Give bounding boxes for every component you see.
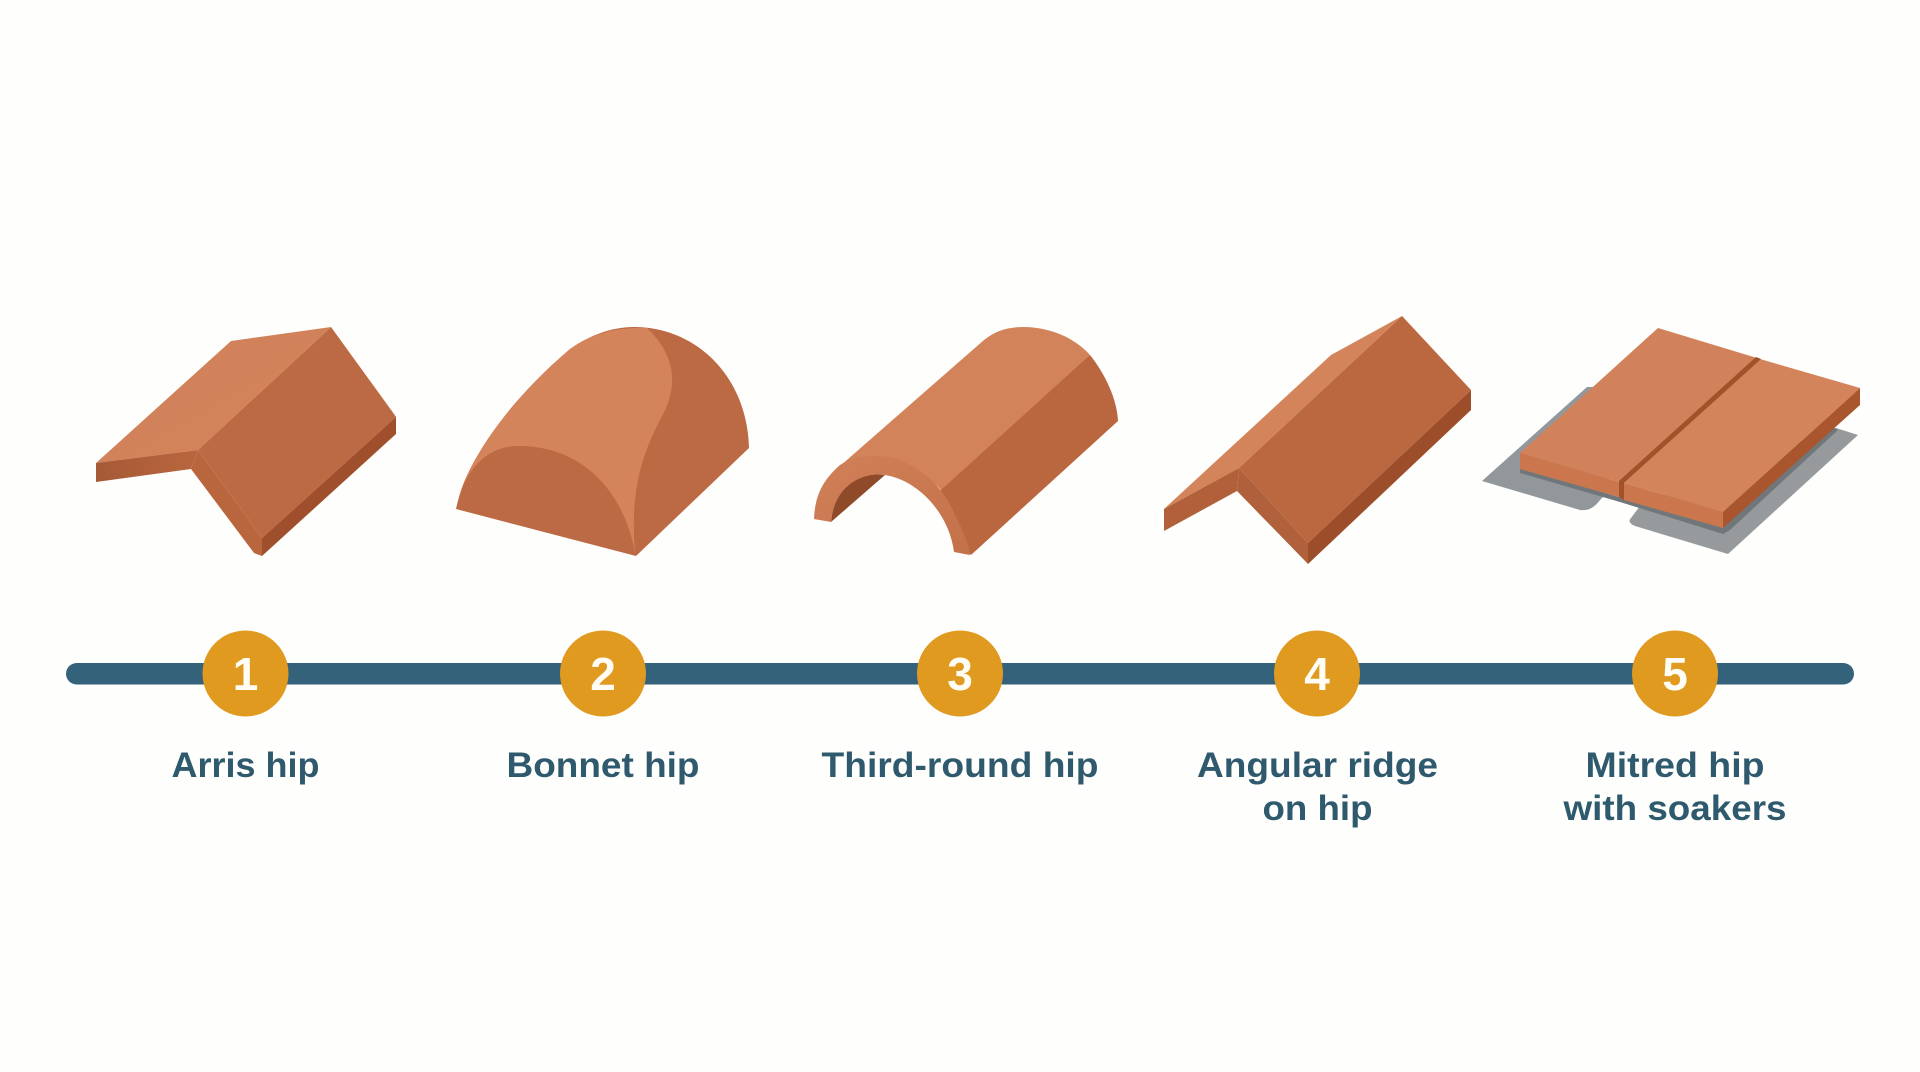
number badge 5	[1632, 630, 1718, 716]
icon: angular ridge on hip tile	[1164, 316, 1471, 564]
step 1: arris hip	[172, 630, 320, 785]
step 5: mitred hip with soakers	[1562, 630, 1786, 828]
icon: mitred hip with soakers	[1482, 328, 1860, 554]
number badge 1	[202, 630, 288, 716]
label: Arris hip: Arris hip	[172, 746, 320, 785]
step 3: third-round hip	[822, 630, 1098, 785]
number badge 1: 1	[233, 648, 258, 700]
number badge 4	[1274, 630, 1360, 716]
icon: bonnet hip tile	[456, 327, 749, 556]
tile slab: left	[1520, 328, 1757, 497]
lead soaker: right	[1630, 428, 1858, 554]
label: Angular ridge on hip: Angular ridge	[1197, 746, 1438, 785]
number badge 2	[560, 630, 646, 716]
label: Mitred hip with soakers	[1562, 746, 1786, 828]
timeline bar	[66, 663, 1854, 684]
label: Third-round hip: Third-round hip	[822, 746, 1098, 785]
tile slab: right	[1624, 359, 1860, 528]
number badge 3: 3	[947, 648, 973, 700]
label: Mitred hip with soakers: with soakers	[1562, 789, 1786, 828]
lead soaker: left	[1482, 387, 1610, 510]
label: Angular ridge on hip	[1197, 746, 1438, 828]
number badge 5: 5	[1662, 648, 1688, 700]
number badge 3	[917, 630, 1003, 716]
label: Mitred hip with soakers: Mitred hip	[1586, 746, 1764, 785]
icon: arris hip tile	[96, 327, 396, 556]
label: Bonnet hip: Bonnet hip	[506, 746, 700, 785]
icon: third-round hip tile	[814, 327, 1118, 555]
number badge 4: 4	[1304, 648, 1330, 700]
label: Angular ridge on hip: on hip	[1262, 789, 1372, 828]
number badge 2: 2	[590, 648, 616, 700]
step 2: bonnet hip	[506, 630, 700, 785]
step 4: angular ridge on hip	[1197, 630, 1438, 828]
